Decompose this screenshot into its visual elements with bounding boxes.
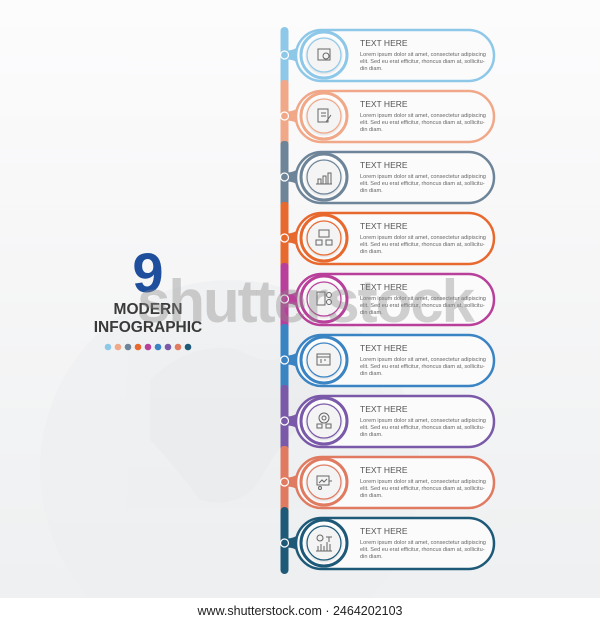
step 5: din diam. [360, 310, 383, 316]
step 8: TEXT HERE [360, 465, 408, 475]
step 3: TEXT HERE [360, 160, 408, 170]
step 7 [280, 396, 494, 447]
step 7: Lorem ipsum dolor sit amet, consectetur adipiscing [360, 418, 486, 424]
step 4: din diam. [360, 249, 383, 255]
colour dots [105, 344, 191, 350]
step 6: elit. Sed eu erat efficitur, rhoncus diam at, sollicitu- [360, 364, 485, 370]
icon [317, 354, 330, 365]
step 8: Lorem ipsum dolor sit amet, consectetur adipiscing [360, 479, 486, 485]
big number 9: 9 [132, 241, 164, 304]
title block: INFOGRAPHIC [94, 319, 202, 336]
step 4 [280, 213, 494, 264]
step 4: TEXT HERE [360, 221, 408, 231]
step 4: elit. Sed eu erat efficitur, rhoncus diam at, sollicitu- [360, 242, 485, 248]
step 2: din diam. [360, 127, 383, 133]
timeline bar [280, 27, 288, 574]
step 5: Lorem ipsum dolor sit amet, consectetur adipiscing [360, 296, 486, 302]
icon [316, 230, 332, 245]
step 5: TEXT HERE [360, 282, 408, 292]
step 7: din diam. [360, 432, 383, 438]
globe background [40, 280, 420, 620]
footer text: www.shutterstock.com · 2464202103 [197, 604, 403, 618]
title block [94, 241, 202, 350]
step 8: elit. Sed eu erat efficitur, rhoncus diam at, sollicitu- [360, 486, 485, 492]
icon [316, 535, 332, 551]
step 6 [280, 335, 494, 386]
step 4: Lorem ipsum dolor sit amet, consectetur adipiscing [360, 235, 486, 241]
icon [317, 476, 332, 490]
step 5: elit. Sed eu erat efficitur, rhoncus diam at, sollicitu- [360, 303, 485, 309]
step 2 [280, 91, 494, 142]
watermark: shutterstock [137, 268, 476, 335]
step 3: Lorem ipsum dolor sit amet, consectetur adipiscing [360, 174, 486, 180]
icon [317, 292, 332, 305]
step 3: elit. Sed eu erat efficitur, rhoncus diam at, sollicitu- [360, 181, 485, 187]
heading: MODERN [114, 301, 182, 318]
step 6: TEXT HERE [360, 343, 408, 353]
step 2: TEXT HERE [360, 99, 408, 109]
step 9: Lorem ipsum dolor sit amet, consectetur adipiscing [360, 540, 486, 546]
step 2: elit. Sed eu erat efficitur, rhoncus diam at, sollicitu- [360, 120, 485, 126]
step 6: din diam. [360, 371, 383, 377]
icon [316, 173, 332, 184]
step 3 [280, 152, 494, 203]
step 7: elit. Sed eu erat efficitur, rhoncus diam at, sollicitu- [360, 425, 485, 431]
step 9 [280, 518, 494, 569]
step 9: din diam. [360, 554, 383, 560]
step 9: TEXT HERE [360, 526, 408, 536]
step 5 [280, 274, 494, 325]
step 6: Lorem ipsum dolor sit amet, consectetur adipiscing [360, 357, 486, 363]
step 3: din diam. [360, 188, 383, 194]
icon [318, 49, 330, 60]
step 1: Lorem ipsum dolor sit amet, consectetur adipiscing [360, 52, 486, 58]
step 1: TEXT HERE [360, 38, 408, 48]
step 1: elit. Sed eu erat efficitur, rhoncus diam at, sollicitu- [360, 59, 485, 65]
step 1: din diam. [360, 66, 383, 72]
icon [318, 109, 331, 122]
step 2: Lorem ipsum dolor sit amet, consectetur adipiscing [360, 113, 486, 119]
step 8 [280, 457, 494, 508]
step 7: TEXT HERE [360, 404, 408, 414]
step 9: elit. Sed eu erat efficitur, rhoncus diam at, sollicitu- [360, 547, 485, 553]
icon [317, 413, 331, 428]
step 8: din diam. [360, 493, 383, 499]
step 1 [280, 30, 494, 81]
